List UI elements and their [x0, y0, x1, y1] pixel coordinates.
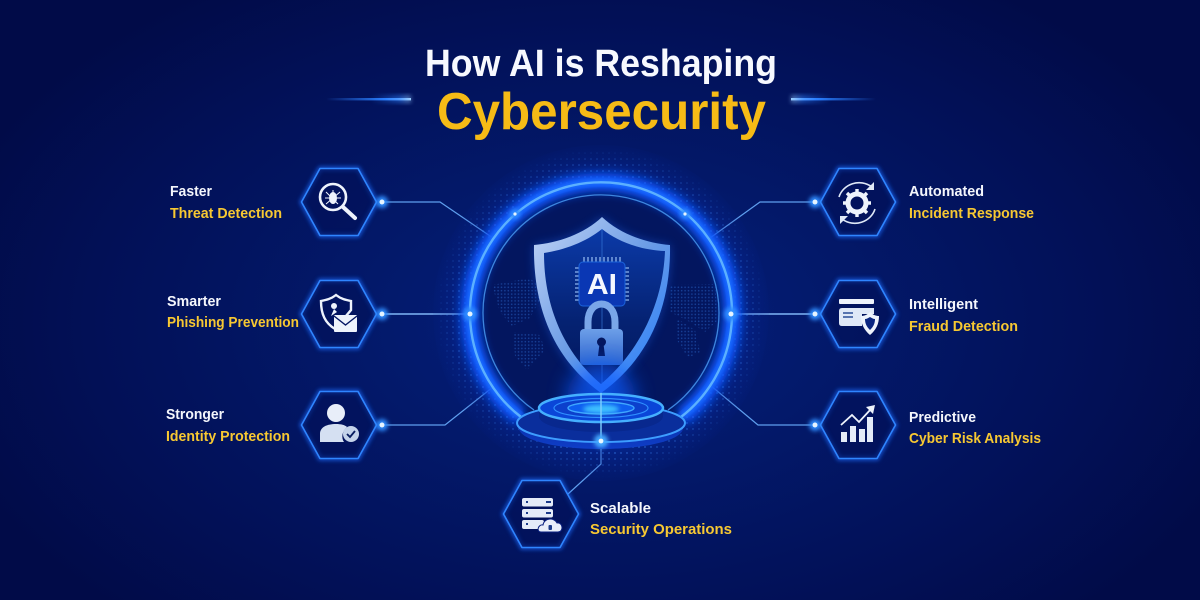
icon: gear with arrows — [839, 182, 875, 224]
connector dot — [809, 419, 821, 431]
item: Intelligent Fraud Detection — [809, 280, 1018, 348]
item: Faster Threat Detection — [170, 168, 388, 236]
label: Fraud Detection — [909, 318, 1018, 335]
title — [425, 43, 777, 141]
platform — [517, 364, 685, 449]
title: How AI is Reshaping — [425, 43, 777, 85]
item: Scalable Security Operations — [504, 480, 732, 548]
label — [166, 406, 290, 445]
label: Scalable — [590, 500, 651, 517]
label: Cyber Risk Analysis — [909, 430, 1041, 447]
label: Phishing Prevention — [167, 314, 299, 331]
glowing outer ring — [470, 182, 732, 417]
item: Stronger Identity Protection — [166, 392, 388, 458]
icon: magnifier with bug — [320, 184, 355, 218]
label: Predictive — [909, 409, 976, 426]
central emblem — [430, 140, 772, 482]
icon: shield and envelope — [321, 295, 357, 332]
item: Automated Incident Response — [809, 168, 1034, 236]
label — [909, 183, 1034, 222]
item: Smarter Phishing Prevention — [167, 280, 388, 348]
title accent: left line — [326, 95, 411, 103]
item: Predictive Cyber Risk Analysis — [809, 392, 1041, 458]
label: Smarter — [167, 293, 221, 310]
label: Identity Protection — [166, 428, 290, 445]
hexagon — [820, 168, 896, 236]
label: Threat Detection — [170, 205, 282, 222]
world map — [492, 278, 718, 370]
label — [170, 183, 282, 222]
connector dot — [376, 419, 388, 431]
icon: servers and cloud lock — [522, 498, 562, 532]
hexagon — [302, 280, 376, 348]
hexagon — [302, 168, 376, 236]
shield — [534, 217, 670, 393]
ring interior — [475, 187, 727, 439]
label: Stronger — [166, 406, 224, 423]
label — [909, 409, 1041, 447]
label: Incident Response — [909, 205, 1034, 222]
connector dot — [376, 196, 388, 208]
label — [590, 500, 732, 538]
icon: user with check — [320, 404, 359, 442]
label: Faster — [170, 183, 212, 200]
label: Intelligent — [909, 296, 978, 313]
connector dot — [376, 308, 388, 320]
hexagon — [820, 392, 896, 458]
hexagon — [504, 480, 578, 548]
padlock — [580, 304, 623, 365]
chip: AI — [587, 269, 617, 301]
ring nodes — [463, 209, 738, 321]
label — [167, 293, 299, 331]
icon: rising bar chart — [841, 405, 875, 442]
connector dot — [809, 196, 821, 208]
title accent: right line — [791, 95, 876, 103]
icon: card and shield — [839, 299, 879, 335]
label: Security Operations — [590, 521, 732, 538]
connector lines — [382, 202, 815, 494]
label: Automated — [909, 183, 984, 200]
hexagon — [820, 280, 896, 348]
label — [909, 296, 1018, 335]
halftone halo — [440, 152, 760, 472]
chip — [575, 257, 629, 306]
hexagon — [302, 392, 376, 458]
title: Cybersecurity — [437, 83, 766, 141]
glow backdrop — [433, 145, 769, 481]
connector dot — [809, 308, 821, 320]
